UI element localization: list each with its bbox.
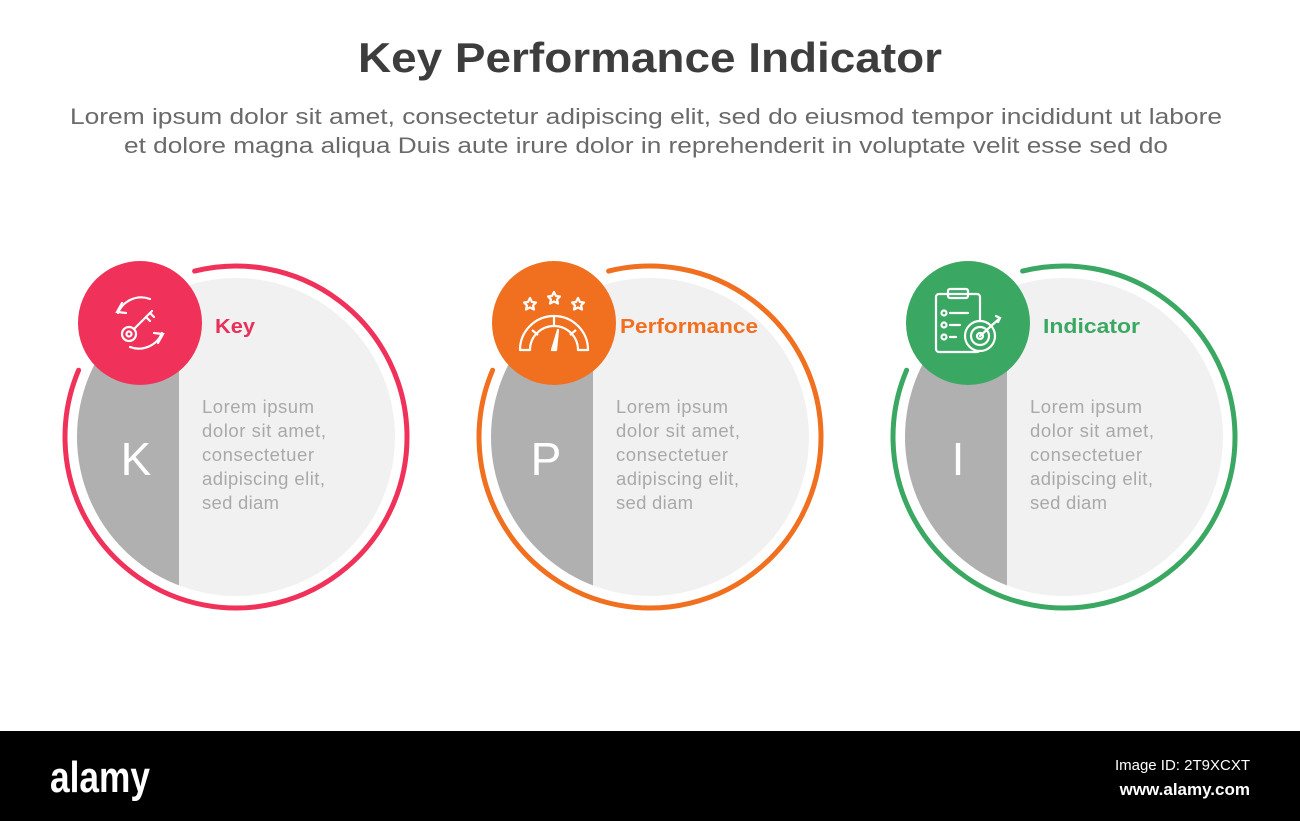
- body text: indicator: Lorem ipsum: [1030, 396, 1142, 417]
- icon circle: key: [78, 261, 202, 385]
- body text: performance: consectetuer: [616, 444, 728, 465]
- panel: key: [65, 261, 407, 610]
- letter P: P: [531, 433, 561, 485]
- body text: performance: [616, 396, 740, 513]
- footer id: Image ID: 2T9XCXT: [1115, 757, 1250, 774]
- panel: performance: [479, 261, 821, 610]
- label: Indicator: Indicator: [1043, 316, 1140, 338]
- body text: indicator: adipiscing elit,: [1030, 468, 1153, 489]
- label: Key: Key: [215, 316, 256, 338]
- ring: indicator: [893, 266, 1235, 608]
- ring: key: [65, 266, 407, 608]
- title: Key Performance Indicator: [358, 34, 942, 81]
- footer logo: alamy: [50, 753, 150, 802]
- body text: indicator: [1030, 396, 1154, 513]
- body text: key: consectetuer: [202, 444, 314, 465]
- body text: key: sed diam: [202, 492, 279, 513]
- body text: key: Lorem ipsum: [202, 396, 314, 417]
- footer url: www.alamy.com: [1119, 780, 1250, 799]
- letter I: I: [952, 433, 964, 485]
- footer bar: [0, 731, 1300, 821]
- ring: performance: [479, 266, 821, 608]
- subtitle: et dolore magna aliqua Duis aute irure dolor in reprehenderit in voluptate velit esse sed do: [124, 133, 1168, 158]
- icon circle: performance: [492, 261, 616, 385]
- body text: indicator: consectetuer: [1030, 444, 1142, 465]
- inner circle: indicator: [898, 270, 1223, 610]
- panel: indicator: [893, 261, 1235, 610]
- subtitle: [70, 104, 1222, 158]
- body text: performance: Lorem ipsum: [616, 396, 728, 417]
- body text: performance: sed diam: [616, 492, 693, 513]
- inner circle: key: [70, 270, 395, 610]
- body text: key: adipiscing elit,: [202, 468, 325, 489]
- icon circle: indicator: [906, 261, 1030, 385]
- letter K: K: [121, 433, 152, 485]
- subtitle: Lorem ipsum dolor sit amet, consectetur adipiscing elit, sed do eiusmod tempor incididunt ut labore: [70, 104, 1222, 129]
- body text: indicator: sed diam: [1030, 492, 1107, 513]
- body text: performance: dolor sit amet,: [616, 420, 740, 441]
- body text: key: dolor sit amet,: [202, 420, 326, 441]
- body text: performance: adipiscing elit,: [616, 468, 739, 489]
- label: Performance: Performance: [620, 316, 758, 338]
- inner circle: performance: [484, 270, 809, 610]
- body text: indicator: dolor sit amet,: [1030, 420, 1154, 441]
- body text: key: [202, 396, 326, 513]
